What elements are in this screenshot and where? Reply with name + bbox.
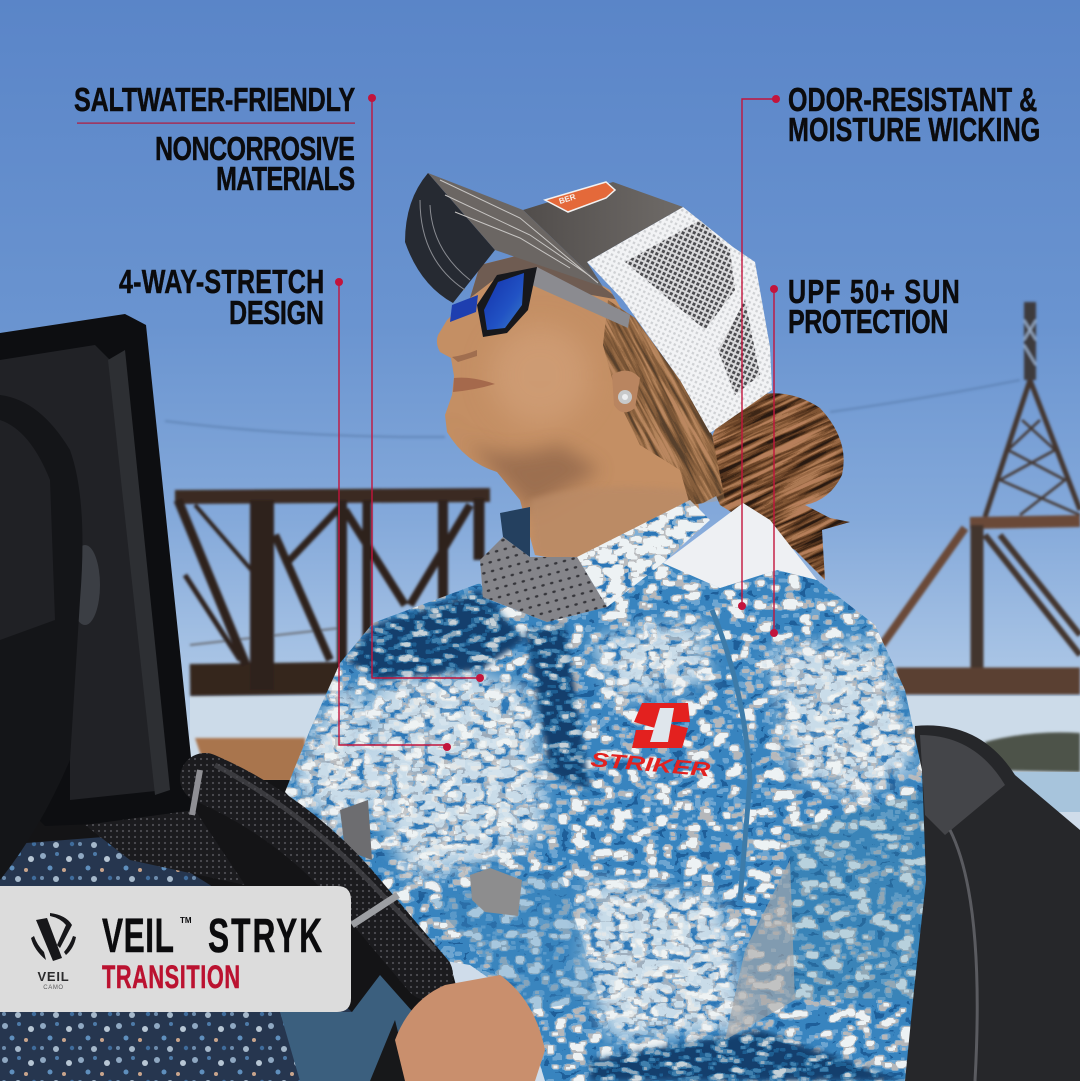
cap orange patch: BER (558, 192, 577, 206)
callout: stretch design (119, 264, 324, 332)
side hair (603, 300, 725, 504)
callout: odor resistant (788, 82, 1040, 149)
left railway bridge (175, 495, 490, 690)
raglan seam (712, 610, 750, 900)
striker chest logo: STRIKER (590, 749, 712, 782)
cap front crown (523, 182, 683, 287)
sleeve tint (790, 790, 925, 1000)
right pylon and bridge (882, 302, 1080, 681)
gray camo patch (470, 868, 522, 916)
callout: odor resistant: MOISTURE WICKING (788, 112, 1040, 149)
callout: sun protection: PROTECTION (788, 304, 948, 341)
product name: STRYK (208, 908, 322, 963)
cap mesh back (587, 207, 772, 433)
far power lines (165, 380, 1020, 437)
veil camo wordmark (37, 969, 70, 991)
product name: VEIL (102, 908, 174, 963)
product variant: TRANSITION (102, 959, 240, 995)
cap brim underside (405, 173, 495, 303)
callout: saltwater-friendly: SALTWATER-FRIENDLY (74, 82, 356, 119)
hoodie (270, 560, 940, 1081)
veil camo wordmark: CAMO (43, 985, 64, 991)
nose shadow (452, 350, 477, 362)
feature callouts and leader lines (74, 82, 1040, 751)
neck shadow (532, 490, 688, 557)
ear and ear plug (612, 371, 640, 412)
lower tint (430, 870, 600, 1010)
cap orange patch (545, 182, 615, 212)
callout: sun protection (788, 274, 960, 341)
callout: odor resistant: ODOR-RESISTANT & (788, 82, 1037, 119)
cheek light (496, 330, 586, 421)
callout: sun protection: UPF 50+ SUN (788, 274, 960, 311)
glitter boat deck (0, 835, 352, 1081)
light camo regions (286, 612, 920, 1052)
leader: stretch design (335, 278, 451, 751)
boat seat (370, 725, 1080, 1081)
product name: TM (180, 916, 192, 925)
sunglasses (450, 267, 630, 337)
product name (102, 908, 322, 963)
cap mesh dark window (625, 220, 760, 395)
water under wheel (280, 975, 420, 1081)
callout: saltwater-friendly (74, 82, 356, 198)
hand on wheel (395, 975, 545, 1081)
leader: saltwater-friendly (368, 94, 484, 682)
gray mesh neck gaiter (480, 537, 607, 622)
under chin shadow (473, 440, 599, 509)
cap brim top (428, 173, 603, 287)
hair bun (712, 393, 850, 580)
shadow under brim (470, 255, 620, 300)
navy collar lining (500, 507, 530, 557)
underarm shade (340, 800, 372, 860)
veil camo wordmark: VEIL (37, 969, 70, 984)
callout: stretch design: 4-WAY-STRETCH (119, 264, 324, 301)
gray side panel (725, 860, 795, 1040)
face and neck (436, 256, 699, 563)
leader: odor resistant (738, 95, 780, 610)
hood interior (663, 503, 817, 588)
helm electronics unit (0, 314, 196, 880)
dark cockpit backdrop (0, 780, 460, 1081)
icon: veil camo logo (31, 913, 76, 961)
callout: saltwater-friendly: NONCORROSIVE (155, 131, 355, 168)
product badge (0, 886, 351, 1012)
hood outer camo collar (577, 500, 710, 607)
callout: stretch design: DESIGN (229, 295, 324, 332)
lips (453, 378, 495, 392)
steering wheel (85, 765, 435, 975)
striker chest logo (590, 703, 712, 782)
dark camo regions (344, 588, 904, 1081)
leader: sun protection (770, 285, 778, 637)
distant shoreline and water (190, 696, 1080, 812)
callout: saltwater-friendly: MATERIALS (216, 161, 355, 198)
cap (405, 173, 772, 433)
